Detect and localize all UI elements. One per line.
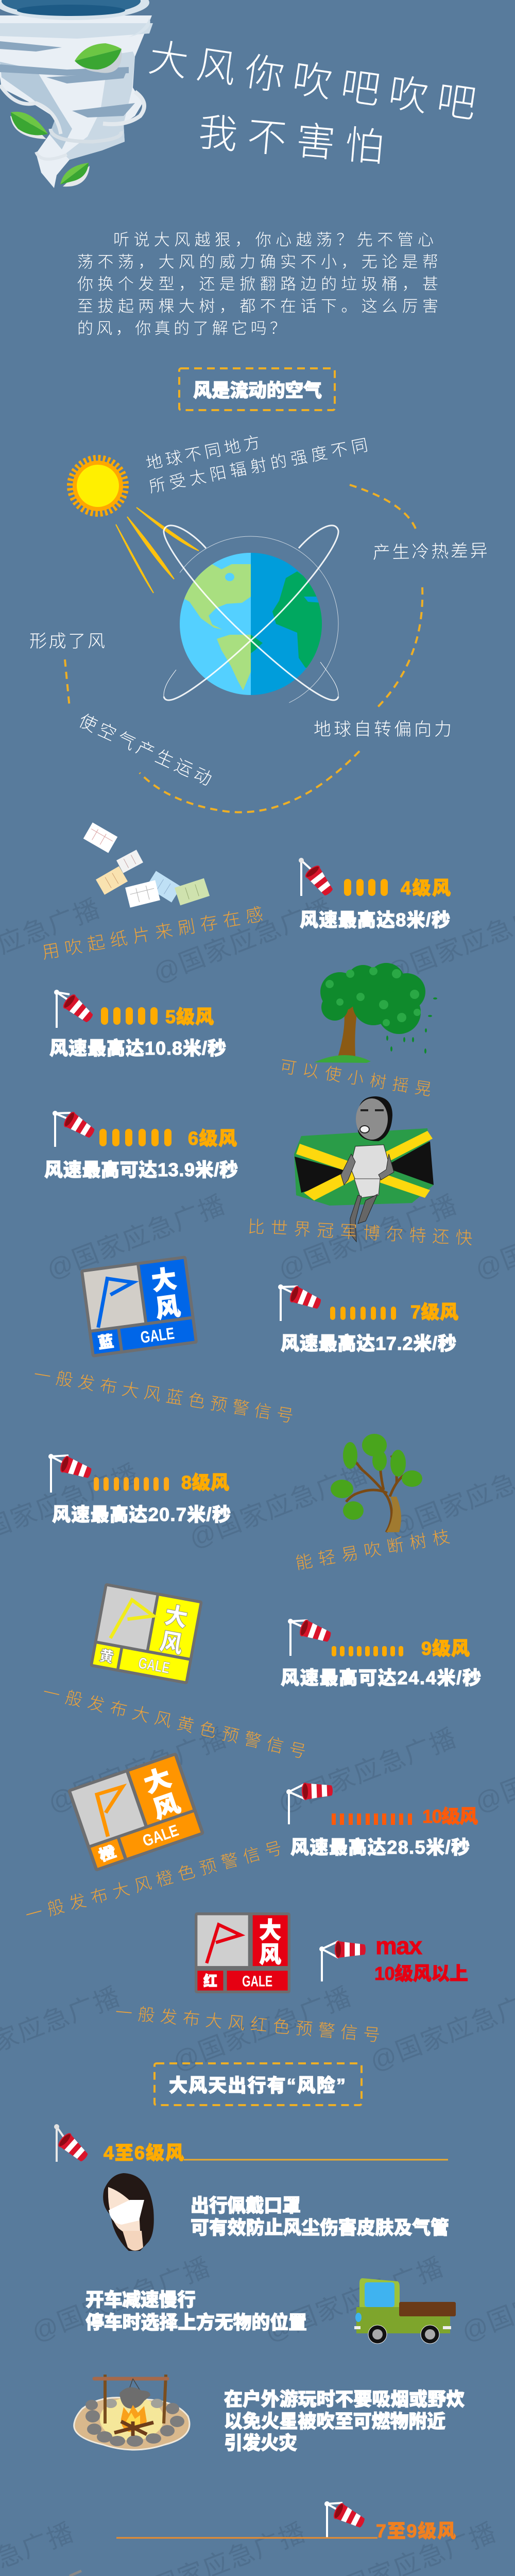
icon: tornado — [0, 0, 153, 188]
caption: blue warning: 一般发布大风蓝色预警信号 — [32, 1365, 295, 1426]
icon: broken branches tree — [331, 1434, 422, 1532]
level label: 8级风 — [181, 1472, 229, 1493]
wind level 8 — [48, 1454, 231, 1525]
wind level 7 — [278, 1284, 458, 1354]
wind speed: 风速最高达10.8米/秒 — [49, 1038, 226, 1059]
caption: orange warning: 一般发布大风橙色预警信号 — [23, 1838, 284, 1925]
wind speed: 风速最高可达24.4米/秒 — [281, 1667, 481, 1688]
intro text: 荡不荡，大风的威力确实不小，无论是帮 — [77, 253, 438, 271]
watermarks: @国家应急广播 — [169, 1982, 355, 2076]
icon: blue gale warning sign: 风 — [154, 1293, 182, 1324]
icon: red gale warning sign: 红 — [203, 1973, 217, 1989]
level label: 7级风 — [410, 1301, 458, 1323]
wind level 5 — [49, 990, 226, 1059]
icon: leaf small — [60, 163, 90, 187]
windsock — [299, 858, 336, 899]
text: no fire outdoors: 在户外游玩时不要吸烟或野炊 — [224, 2388, 465, 2410]
text: wear a mask: 可有效防止风尘伤害皮肤及气管 — [191, 2217, 449, 2238]
label: temperature difference: 产生冷热差异 — [372, 541, 488, 563]
watermarks: @国家应急广播 — [185, 1459, 371, 1553]
windsock — [288, 1619, 333, 1656]
windsock — [53, 1111, 97, 1147]
icon: yellow gale warning sign: 大 — [162, 1602, 190, 1632]
intro text — [77, 231, 438, 337]
icon: leaf large — [75, 43, 122, 73]
text: drive slowly: 停车时选择上方无物的位置 — [85, 2312, 307, 2333]
flag — [294, 1128, 434, 1206]
level bars — [99, 1129, 171, 1146]
level bars — [330, 1307, 396, 1320]
icon: bicycle — [49, 2571, 129, 2576]
windsock — [54, 990, 96, 1028]
section: level 4 to 6 — [54, 2124, 448, 2164]
icon: yellow gale warning sign — [90, 1583, 203, 1685]
arrow: air motion to wind — [65, 659, 70, 707]
level label: 7至9级风 — [376, 2520, 456, 2541]
caption: faster than Bolt: 比世界冠军博尔特还快 — [247, 1217, 473, 1248]
watermarks: @国家应急广播 — [28, 2252, 214, 2347]
windsock — [48, 1454, 93, 1493]
max wind level — [319, 1932, 468, 1984]
label: air motion: 使空气产生运动 — [76, 711, 215, 789]
title — [146, 36, 479, 170]
sun caption: 地球不同地方 — [144, 433, 262, 473]
level bars — [344, 879, 388, 896]
wind speed: 风速最高达17.2米/秒 — [281, 1333, 456, 1354]
icon: blue gale warning sign: 蓝 — [97, 1333, 115, 1352]
icon: papers — [83, 822, 210, 908]
caption: swaying tree: 可以使小树摇晃 — [279, 1057, 433, 1099]
level bars — [94, 1477, 169, 1491]
windsock — [324, 2501, 367, 2538]
icon: red gale warning sign: 大 — [259, 1918, 281, 1943]
text: wear a mask — [191, 2195, 449, 2238]
icon: red gale warning sign: GALE — [242, 1973, 272, 1990]
rule — [116, 2537, 377, 2539]
icon: woman with mask — [103, 2173, 154, 2251]
icon: blue gale warning sign: GALE — [140, 1324, 176, 1347]
watermarks: @国家应急广播 — [149, 894, 335, 988]
text: wear a mask: 出行佩戴口罩 — [191, 2195, 301, 2216]
level label: 9级风 — [421, 1638, 470, 1659]
icon: yellow gale warning sign: 风 — [158, 1628, 185, 1658]
icon: Jamaica flag and runner — [294, 1096, 434, 1242]
icon: truck — [354, 2278, 456, 2344]
rule — [184, 2159, 448, 2161]
watermarks: @国家应急广播 — [44, 1723, 230, 1818]
orbit lines — [164, 526, 338, 700]
level label: 5级风 — [165, 1006, 214, 1027]
caption: snaps branches: 能轻易吹断树枝 — [294, 1527, 451, 1573]
runner — [341, 1096, 394, 1242]
text: no fire outdoors — [224, 2388, 465, 2453]
wind level 6 — [44, 1111, 238, 1180]
watermarks: @国家应急广播 — [261, 2252, 447, 2347]
icon: red gale warning sign: 风 — [259, 1942, 282, 1968]
label: forms wind: 形成了风 — [29, 632, 105, 651]
text: no fire outdoors: 以免火星被吹至可燃物附近 — [224, 2411, 445, 2432]
heading: windy day travel risk — [154, 2063, 362, 2105]
wind speed: 风速最高达28.5米/秒 — [290, 1837, 470, 1858]
icon: orange gale warning sign: 橙 — [97, 1843, 118, 1865]
heading: wind is moving air: 风是流动的空气 — [193, 380, 322, 401]
icon: sun rays — [116, 507, 199, 593]
wind speed: 风速最高达8米/秒 — [300, 909, 450, 930]
wind level 4 — [299, 858, 451, 930]
watermarks: @国家应急广播 — [274, 1190, 460, 1284]
level label: 10级风以上 — [374, 1963, 468, 1984]
windsock — [286, 1782, 333, 1824]
icon: yellow gale warning sign: GALE — [137, 1654, 171, 1677]
level bars — [101, 1007, 158, 1025]
icon: orange gale warning sign: 风 — [149, 1790, 184, 1824]
icon: campfire — [74, 2375, 190, 2450]
level bars — [332, 1814, 412, 1825]
icon: orange gale warning sign: 大 — [141, 1764, 175, 1798]
icon: sun — [72, 460, 124, 512]
intro text: 至拔起两棵大树，都不在话下。这么厉害 — [77, 297, 438, 315]
heading: windy day travel risk: 大风天出行有“风险” — [169, 2075, 346, 2096]
icon: blue gale warning sign: 大 — [150, 1265, 178, 1296]
windsock — [54, 2124, 91, 2164]
wind level 10 — [286, 1782, 478, 1858]
watermarks: @国家应急广播 — [43, 1190, 229, 1284]
watermarks: @国家应急广播 — [274, 1723, 460, 1818]
wind speed: 风速最高达20.7米/秒 — [52, 1504, 231, 1525]
heading: wind is moving air — [179, 368, 335, 410]
wind speed: 风速最高可达13.9米/秒 — [44, 1159, 238, 1180]
level bars — [332, 1646, 403, 1656]
arrow: temperature to coriolis — [376, 587, 422, 709]
wind level 9 — [281, 1619, 481, 1688]
intro text: 听说大风越狠，你心越荡？先不管心 — [113, 231, 434, 249]
level label: 4级风 — [401, 877, 451, 899]
arrow: sun to temperature difference — [350, 485, 416, 529]
text: no fire outdoors: 引发火灾 — [224, 2432, 297, 2453]
section: level 7 to 9 — [116, 2501, 456, 2541]
title: 大风你吹吧吹吧 — [146, 36, 479, 127]
title: 我不害怕 — [197, 110, 386, 170]
intro text: 你换个发型，还是掀翻路边的垃圾桶，甚 — [77, 275, 438, 293]
icon: yellow gale warning sign: 黄 — [98, 1647, 115, 1666]
text: drive slowly — [85, 2289, 307, 2333]
caption: red warning: 一般发布大风红色预警信号 — [114, 2003, 381, 2045]
caption: papers: 用吹起纸片来刷存在感 — [41, 905, 265, 963]
arrow: coriolis to air motion — [140, 751, 359, 812]
level label: 10级风 — [422, 1806, 478, 1827]
sun caption: 所受太阳辐射的强度不同 — [147, 435, 369, 496]
windsock — [319, 1941, 366, 1981]
windsock — [278, 1284, 323, 1321]
icon: leaf middle — [10, 112, 48, 139]
text: drive slowly: 开车减速慢行 — [85, 2289, 196, 2310]
level label: 4至6级风 — [104, 2142, 184, 2163]
icon: earth — [163, 526, 338, 711]
max label: max — [375, 1932, 422, 1959]
level label: 6级风 — [188, 1128, 237, 1149]
caption: yellow warning: 一般发布大风黄色预警信号 — [41, 1682, 308, 1761]
label: coriolis force: 地球自转偏向力 — [314, 720, 452, 739]
watermarks — [0, 894, 515, 2576]
icon: blue gale warning sign — [80, 1256, 198, 1358]
intro text: 的风，你真的了解它吗？ — [77, 319, 286, 337]
icon: red gale warning sign — [195, 1912, 290, 1993]
icon: orange gale warning sign: GALE — [140, 1821, 181, 1850]
icon: swaying tree — [314, 963, 437, 1063]
icon: orange gale warning sign — [67, 1752, 205, 1872]
